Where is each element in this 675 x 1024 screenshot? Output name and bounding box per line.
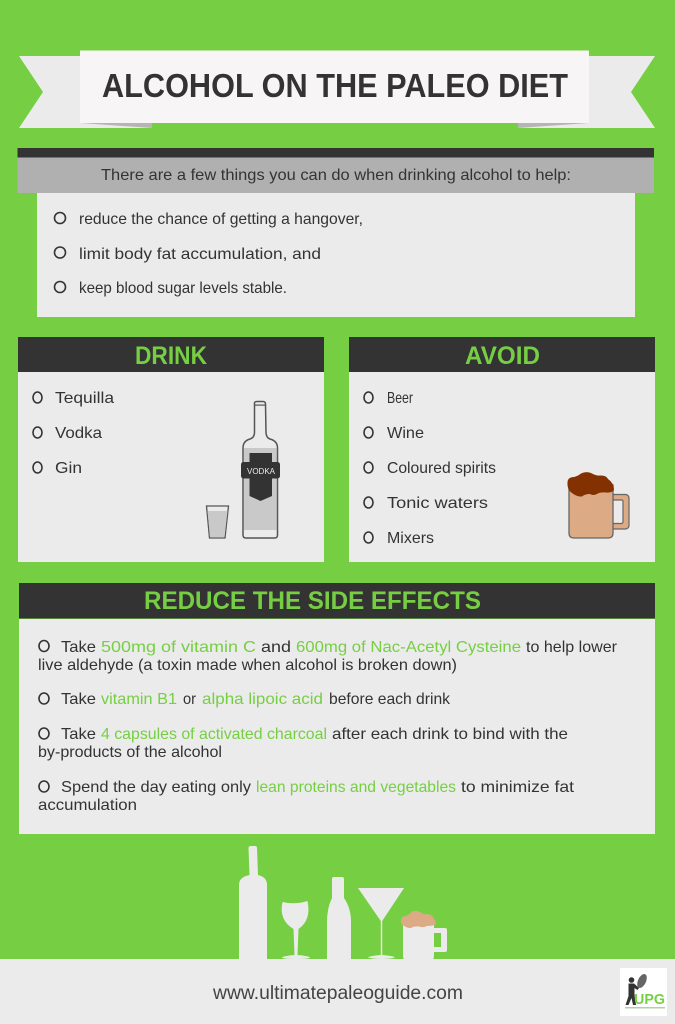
drink heading: DRINK [135,342,207,370]
drink list: Tequilla [55,390,114,407]
side effects heading: REDUCE THE SIDE EFFECTS [144,587,481,615]
icon: small bottle [327,877,351,960]
tip: lean proteins: lean proteins and vegetables [256,779,456,796]
tip: vitamin C and NAC: live aldehyde (a toxin made when alcohol is broken down) [38,657,457,674]
icon: beer mug silhouette [401,911,447,960]
logo: UPG [620,968,667,1016]
avoid list [364,390,496,547]
tip: lean proteins: to minimize fat [461,779,575,796]
drink list: Vodka [55,425,102,442]
tip: vitamin C and NAC: 600mg of Nac-Acetyl Cysteine [296,639,521,656]
title: ALCOHOL ON THE PALEO DIET [102,67,568,104]
tip: activated charcoal: by-products of the alcohol [38,744,222,761]
tip: vitamin C and NAC: Take [61,639,96,656]
icon: bottle silhouettes [239,846,404,960]
tip: activated charcoal [38,726,568,761]
intro list: limit body fat accumulation, and [79,246,321,263]
icon: figure with club [626,973,649,1005]
tip: activated charcoal: Take [61,726,96,743]
avoid heading: AVOID [465,342,540,370]
intro list [54,211,363,297]
tip: vitamin B1: before each drink [329,691,451,708]
avoid list: Mixers [387,530,434,547]
panel: drink [18,337,324,562]
icon: shot glass [206,506,228,538]
intro heading: There are a few things you can do when drinking alcohol to help: [101,167,571,184]
website url: www.ultimatepaleoguide.com [212,983,463,1004]
tip: vitamin B1: vitamin B1 [101,691,177,708]
title banner [19,50,655,128]
bottle label: VODKA [247,467,276,476]
footer bar [0,959,675,1024]
tip: vitamin C and NAC: and [261,639,291,656]
avoid list: Beer [387,390,414,407]
drink list: Gin [55,460,82,477]
tip: activated charcoal: after each drink to bind with the [332,726,568,743]
panel: avoid [349,337,655,562]
tip: vitamin B1: Take [61,691,96,708]
icon: beer mug [567,472,629,538]
tip: vitamin C and NAC: to help lower [526,639,618,656]
drink list [33,390,114,477]
tip: vitamin B1: or [183,691,197,708]
tip: vitamin C and NAC: 500mg of vitamin C [101,639,256,656]
tip: vitamin B1 [39,691,451,708]
avoid list: Wine [387,425,424,442]
intro list: keep blood sugar levels stable. [79,280,287,297]
avoid list: Tonic waters [387,495,488,512]
tip: vitamin B1: alpha lipoic acid [202,691,323,708]
logo wordmark: UPG [634,991,665,1008]
tip: vitamin C and NAC [38,639,618,674]
panel: reduce the side effects [19,583,655,834]
tip: lean proteins: accumulation [38,797,137,814]
tip: activated charcoal: 4 capsules of activated charcoal [101,726,327,743]
tip: lean proteins: Spend the day eating only [61,779,251,796]
icon: wine glass [282,901,310,959]
icon: vodka bottle [241,402,280,538]
icon: tall bottle [239,846,267,960]
avoid list: Coloured spirits [387,460,496,477]
intro list: reduce the chance of getting a hangover, [79,211,363,228]
icon: martini glass [358,888,404,959]
tip: lean proteins [38,779,575,814]
panel: intro [18,148,654,317]
